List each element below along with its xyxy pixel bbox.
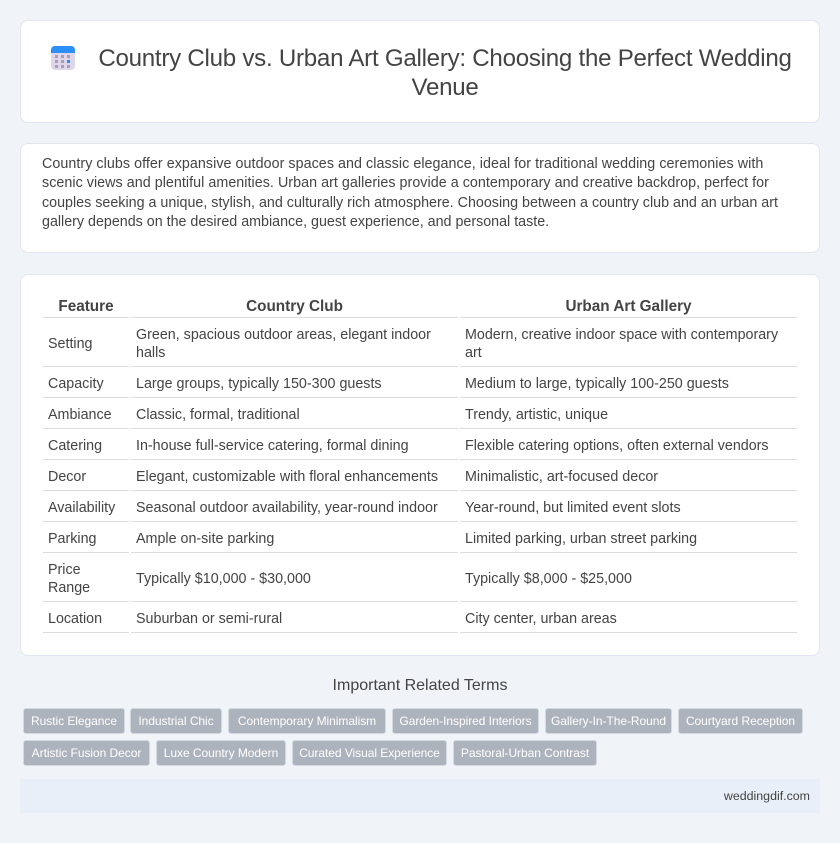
comparison table: Feature	[58, 298, 114, 315]
comparison table: Elegant, customizable with floral enhancements	[136, 469, 438, 485]
icon: calendar	[51, 46, 75, 70]
comparison table: Location	[48, 611, 102, 627]
tag list: related terms: Courtyard Reception	[686, 714, 795, 728]
comparison table: Setting	[48, 336, 93, 352]
comparison table	[43, 298, 797, 633]
comparison table: Ample on-site parking	[136, 531, 274, 547]
comparison table: Catering	[48, 438, 102, 454]
comparison table: Typically $10,000 - $30,000	[136, 571, 311, 587]
tag list: related terms: Luxe Country Modern	[164, 746, 278, 760]
comparison table: Classic, formal, traditional	[136, 407, 300, 423]
comparison table: Trendy, artistic, unique	[465, 407, 608, 423]
comparison table: Capacity	[48, 376, 104, 392]
tag list: related terms: Gallery-In-The-Round	[551, 714, 666, 728]
comparison table: Typically $8,000 - $25,000	[465, 571, 632, 587]
tag list: related terms	[23, 708, 803, 766]
comparison table: Limited parking, urban street parking	[465, 531, 697, 547]
comparison table: Decor	[48, 469, 86, 485]
text block: introduction: scenic views and plentiful amenities. Urban art galleries provide a contemporary and creative backdrop, perfect for	[42, 175, 769, 191]
panel: description	[20, 143, 820, 253]
comparison table: Suburban or semi-rural	[136, 611, 282, 627]
panel: comparison table	[20, 274, 820, 656]
text block: introduction: gallery depends on the desired ambiance, guest experience, and personal taste.	[42, 214, 549, 230]
comparison table: Large groups, typically 150-300 guests	[136, 376, 382, 392]
text block: introduction	[42, 156, 778, 230]
comparison table: Modern, creative indoor space with contemporary art	[465, 327, 778, 361]
text block: introduction: Country clubs offer expansive outdoor spaces and classic elegance, ideal for traditional wedding ceremonies with	[42, 156, 763, 172]
comparison table: Country Club	[246, 298, 343, 315]
comparison table: Seasonal outdoor availability, year-round indoor	[136, 500, 438, 516]
comparison table: Ambiance	[48, 407, 112, 423]
footer: weddingdif.com	[724, 789, 810, 803]
comparison table: Availability	[48, 500, 115, 516]
comparison table: Price Range	[48, 562, 90, 596]
tag list: related terms: Garden-Inspired Interiors	[399, 714, 532, 728]
tag list: related terms: Contemporary Minimalism	[238, 714, 376, 728]
tag list: related terms: Curated Visual Experience	[299, 746, 440, 760]
tag list: related terms: Rustic Elegance	[31, 714, 117, 728]
comparison table: City center, urban areas	[465, 611, 617, 627]
tag list: related terms: Pastoral-Urban Contrast	[461, 746, 589, 760]
comparison table: Green, spacious outdoor areas, elegant indoor halls	[136, 327, 431, 361]
text block: introduction: couples seeking a unique, stylish, and culturally rich atmosphere. Choosing between a country club and an urban art	[42, 194, 778, 210]
heading: related terms: Important Related Terms	[333, 677, 507, 694]
comparison table: Parking	[48, 531, 96, 547]
tag list: related terms: Artistic Fusion Decor	[32, 746, 141, 760]
title: Country Club vs. Urban Art Gallery: Choosing the Perfect Wedding Venue	[98, 45, 792, 101]
tag list: related terms: Industrial Chic	[138, 714, 214, 728]
comparison table: Minimalistic, art-focused decor	[465, 469, 658, 485]
panel: header	[20, 20, 820, 123]
comparison table: Medium to large, typically 100-250 guests	[465, 376, 729, 392]
comparison table: Flexible catering options, often external vendors	[465, 438, 769, 454]
footer	[20, 779, 820, 813]
comparison table: In-house full-service catering, formal dining	[136, 438, 409, 454]
comparison table: Urban Art Gallery	[565, 298, 692, 315]
comparison table: Year-round, but limited event slots	[465, 500, 681, 516]
